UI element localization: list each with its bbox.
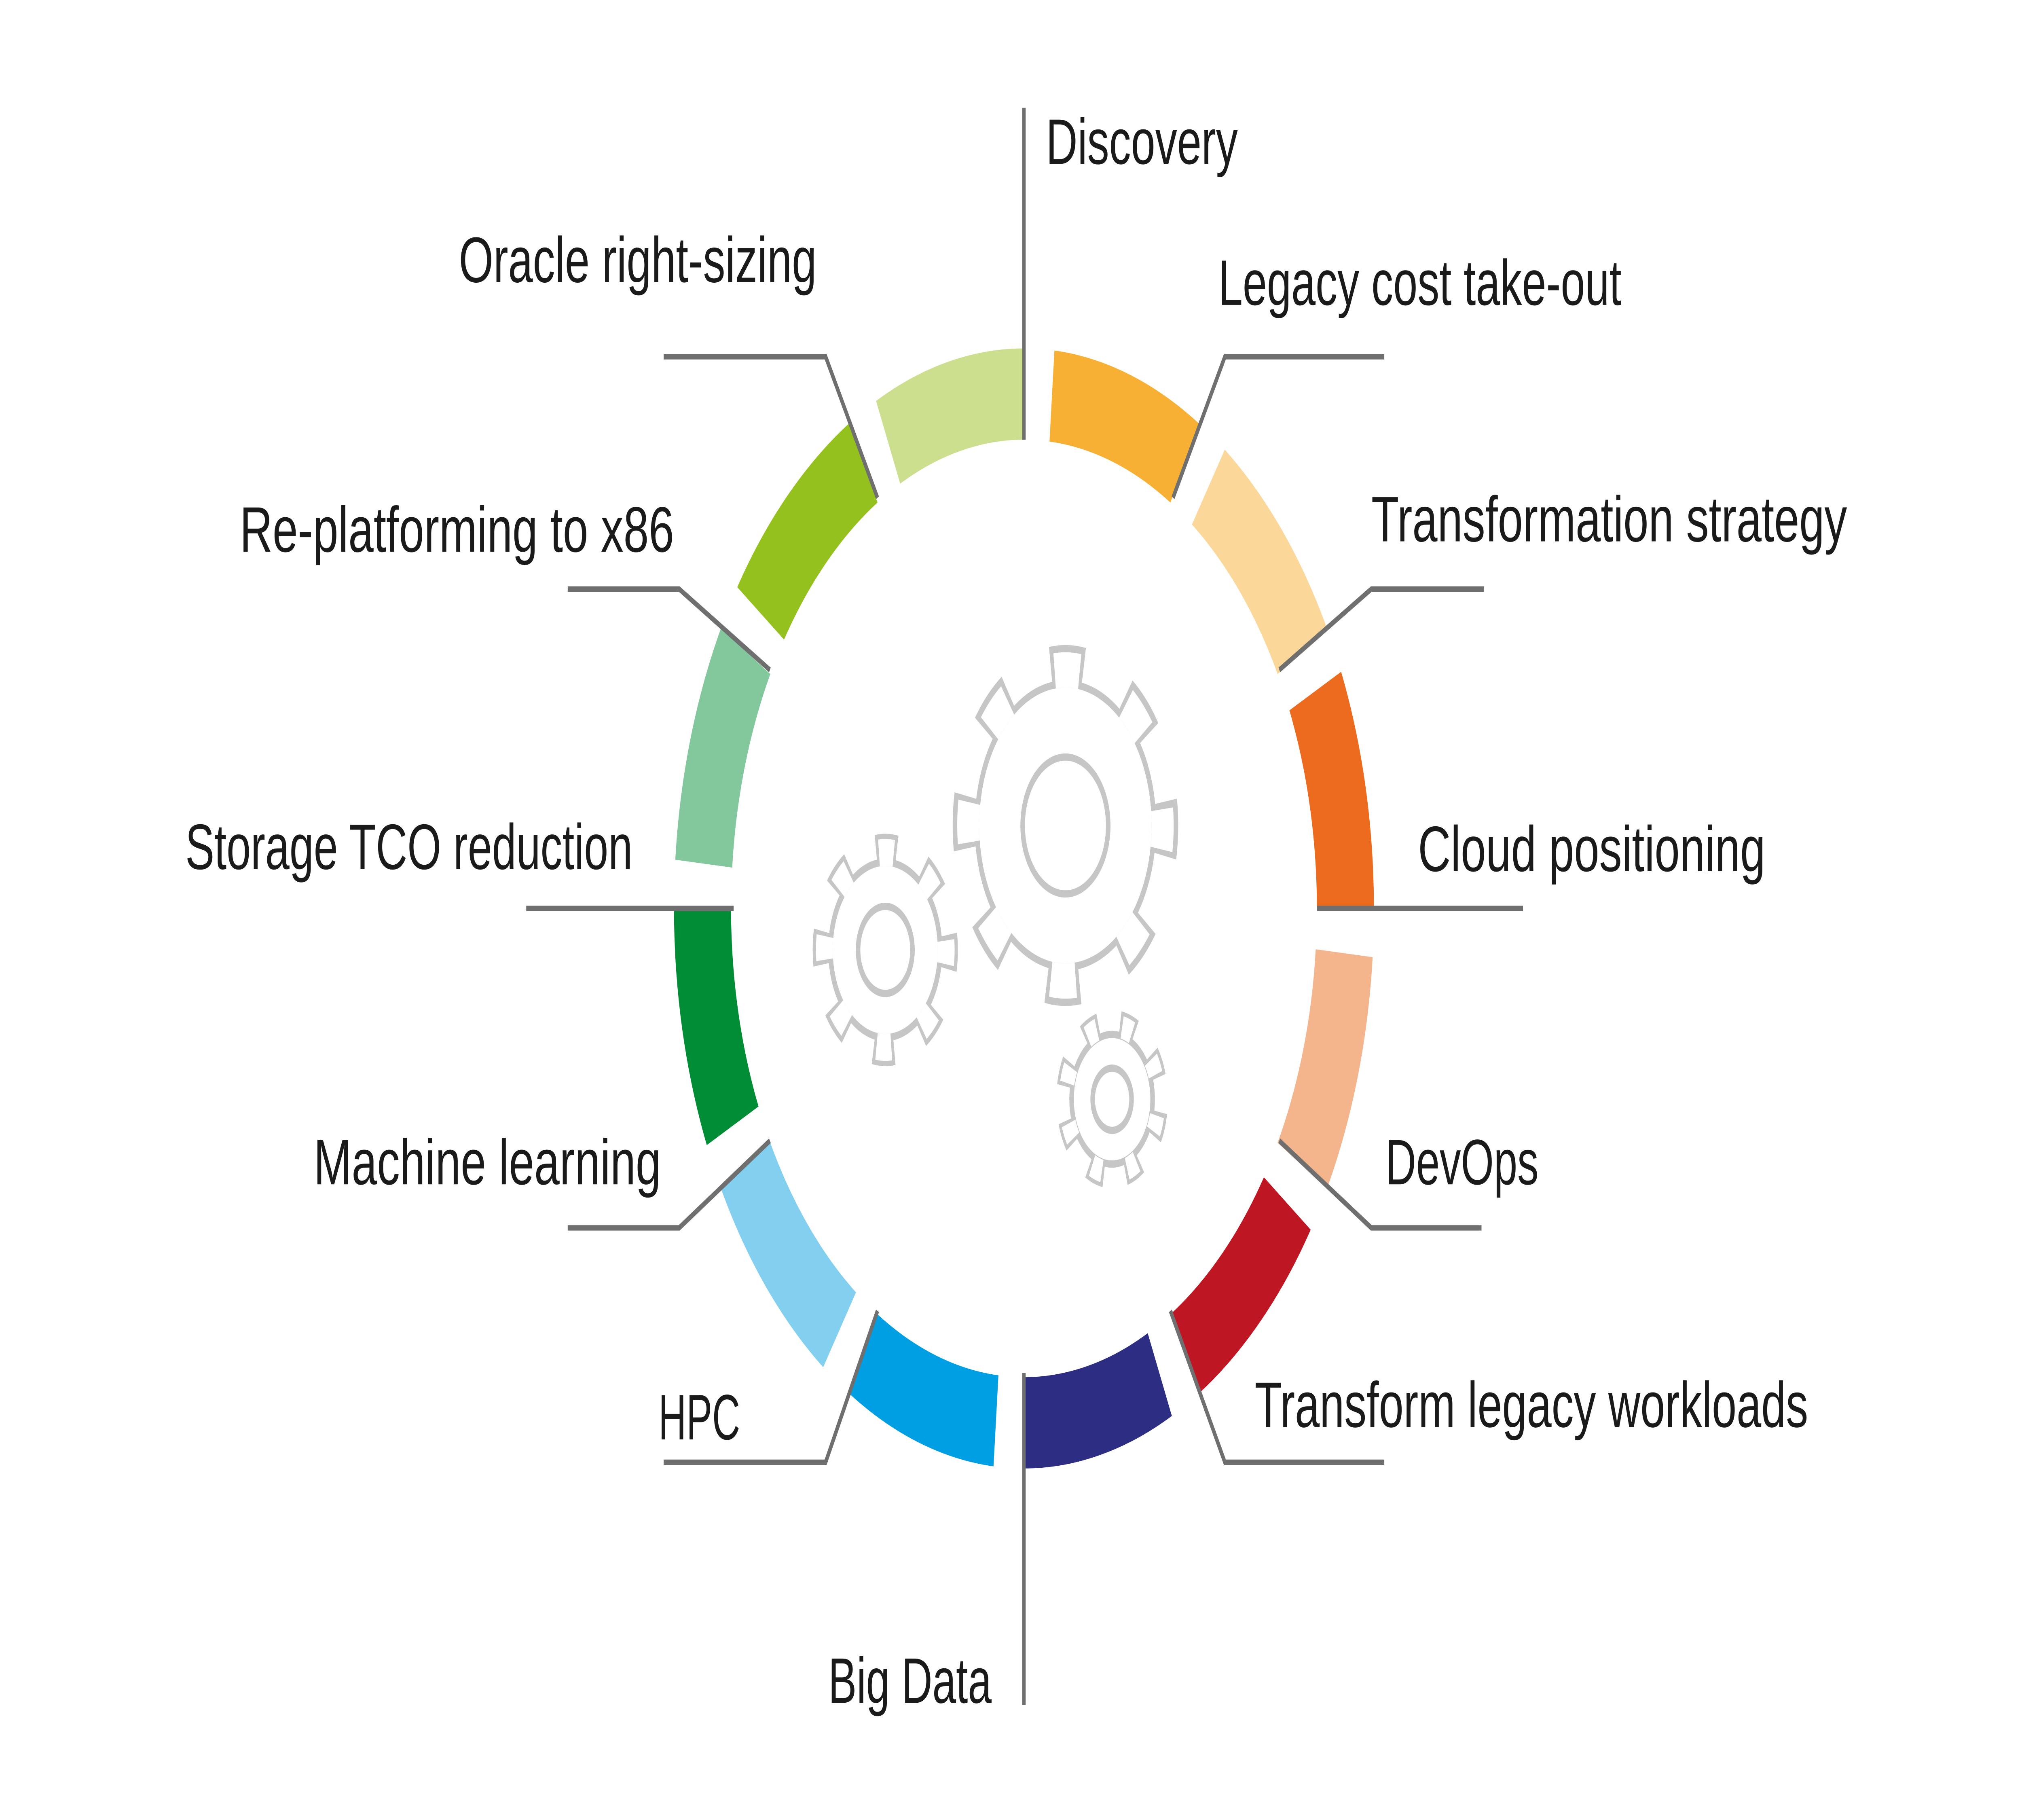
segment: Cloud positioning bbox=[1289, 672, 1374, 908]
ring of segments bbox=[674, 349, 1374, 1469]
segment: Transform legacy workloads bbox=[1170, 1177, 1311, 1393]
label: Machine learning: Machine learning bbox=[314, 1126, 661, 1198]
label: Re-platforming to x86: Re-platforming to x86 bbox=[240, 494, 674, 566]
leader lines bbox=[526, 108, 1523, 1705]
label: Big Data: Big Data bbox=[828, 1645, 992, 1717]
labels bbox=[185, 106, 1847, 1717]
segment: Storage TCO reduction bbox=[674, 908, 759, 1145]
label: Legacy cost take-out: Legacy cost take-out bbox=[1218, 247, 1622, 319]
segment: Discovery bbox=[876, 349, 1024, 484]
segment: Oracle right-sizing bbox=[737, 423, 878, 640]
segment: Transformation strategy bbox=[1192, 450, 1327, 674]
segment: Machine learning bbox=[721, 1143, 856, 1367]
label: Storage TCO reduction: Storage TCO reduction bbox=[185, 811, 632, 883]
label: Transformation strategy: Transformation strategy bbox=[1371, 484, 1847, 555]
gear: big bbox=[952, 644, 1179, 1007]
segment: Re-platforming to x86 bbox=[675, 629, 770, 868]
gears bbox=[813, 644, 1179, 1189]
segment: Big Data bbox=[1024, 1333, 1172, 1469]
segment: HPC bbox=[849, 1314, 998, 1467]
label: Oracle right-sizing: Oracle right-sizing bbox=[459, 224, 816, 296]
label: Cloud positioning: Cloud positioning bbox=[1418, 813, 1765, 885]
segment: Legacy cost take-out bbox=[1049, 351, 1199, 503]
label: Discovery: Discovery bbox=[1046, 106, 1238, 178]
label: DevOps: DevOps bbox=[1385, 1126, 1538, 1198]
segment: DevOps bbox=[1277, 949, 1373, 1188]
label: HPC: HPC bbox=[658, 1382, 740, 1454]
label: Transform legacy workloads: Transform legacy workloads bbox=[1255, 1369, 1808, 1441]
gear: bottom bbox=[1056, 1009, 1168, 1189]
gear: left bbox=[813, 834, 958, 1066]
